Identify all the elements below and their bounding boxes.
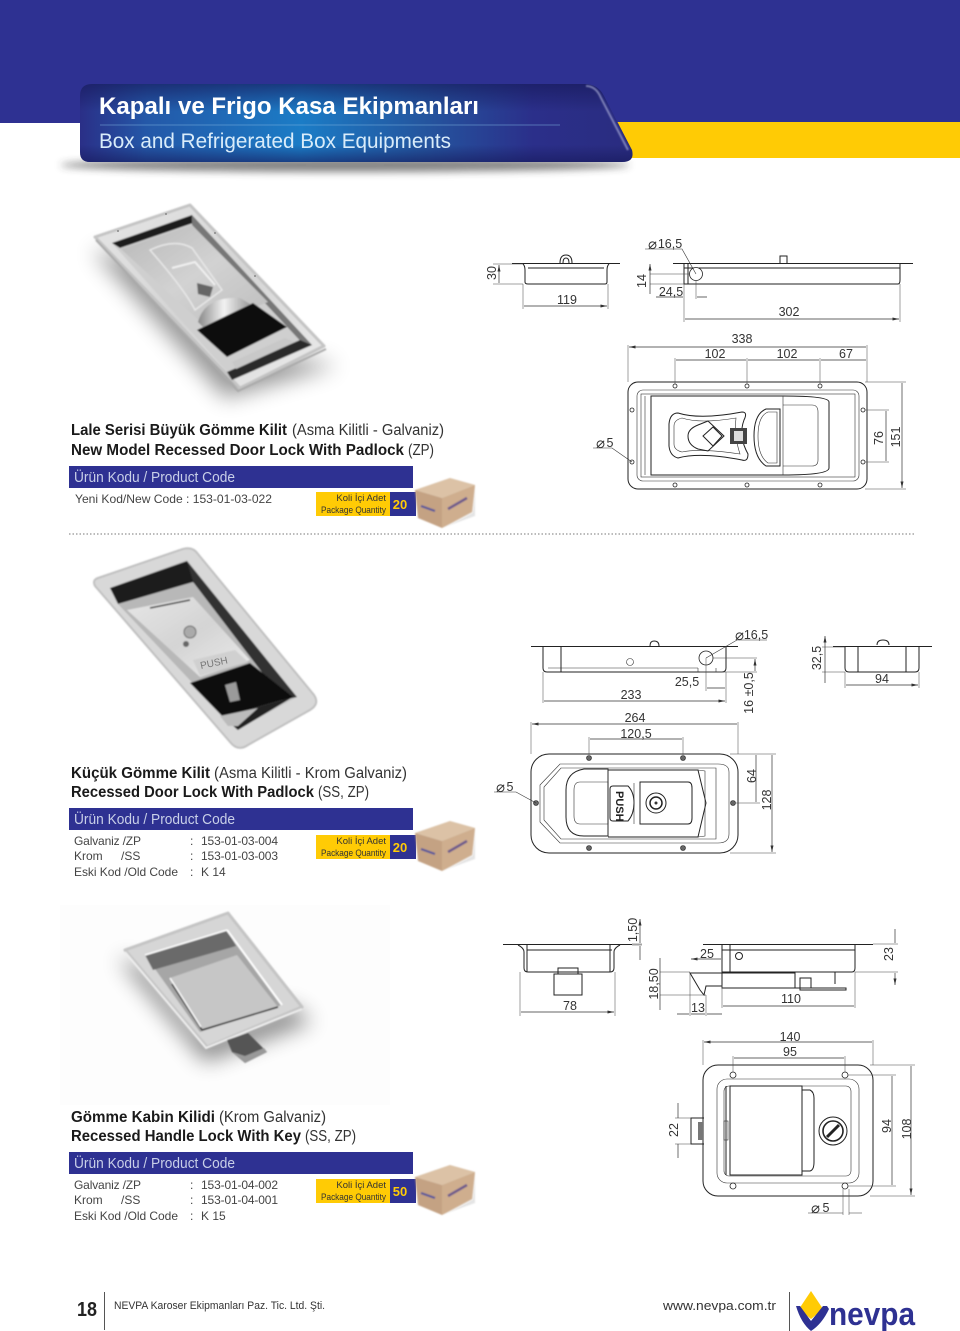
- side view: [531, 626, 768, 714]
- plan view: ⌀: [596, 434, 605, 452]
- heading: product 3 name: (Krom Galvaniz): [219, 1109, 326, 1126]
- side view: 23: [882, 947, 896, 961]
- product code bar 3: [69, 1152, 413, 1174]
- heading: product 2 name: (SS, ZP): [318, 784, 369, 801]
- product code table 3: :: [190, 1193, 193, 1207]
- end view: 32,5: [810, 646, 824, 670]
- product code table 3: Krom: [74, 1193, 103, 1207]
- plan view: 102: [777, 347, 797, 361]
- package quantity 3: 50: [393, 1184, 407, 1199]
- plan view: [667, 1030, 915, 1217]
- end view: [503, 918, 642, 1016]
- end view: 78: [563, 999, 577, 1013]
- heading: product 3 name: Gömme Kabin Kilidi: [71, 1109, 215, 1126]
- plan view: 120,5: [620, 727, 652, 741]
- header blue band: [0, 0, 960, 123]
- product code table 2: 153-01-03-003: [201, 849, 278, 863]
- plan view: 64: [745, 769, 759, 783]
- plan view: 128: [760, 790, 774, 810]
- product code table 2: :: [190, 849, 193, 863]
- plan view: 22: [667, 1123, 681, 1137]
- product code table 3: :: [190, 1209, 193, 1223]
- side view: [635, 235, 913, 322]
- product code table 2: Krom: [74, 849, 103, 863]
- end view: 30: [485, 266, 499, 280]
- technical drawing: small lock dimensions: [494, 626, 932, 853]
- plan view: 5: [607, 436, 614, 450]
- side view: 233: [621, 688, 641, 702]
- technical drawing: large lock dimensions: [485, 235, 913, 489]
- product code table 2: [74, 834, 278, 879]
- plan view: 76: [872, 431, 886, 445]
- product code bar 1: [69, 466, 413, 488]
- company name: NEVPA Karoser Ekipmanları Paz. Tic. Ltd. Şti.: [114, 1300, 325, 1312]
- product code bar 3: Ürün Kodu / Product Code: [74, 1154, 235, 1172]
- product code table 3: Eski Kod /Old Code: [74, 1209, 178, 1223]
- side view: 110: [781, 992, 801, 1006]
- photo: large recessed door lock: [92, 205, 338, 398]
- divider: [69, 533, 916, 535]
- product code table 3: [74, 1178, 278, 1223]
- product code table 2: 153-01-03-004: [201, 834, 278, 848]
- product code table 3: :: [190, 1178, 193, 1192]
- package quantity 2: Package Quantity: [321, 848, 386, 859]
- heading: product 1 name: (Asma Kilitli - Galvaniz): [292, 422, 444, 439]
- header yellow band: [600, 122, 960, 158]
- package quantity 3: [316, 1165, 475, 1215]
- plan view: 264: [625, 711, 645, 725]
- product code text 1: Yeni Kod/New Code : 153-01-03-022: [75, 492, 272, 506]
- side view: 18,50: [647, 968, 661, 1000]
- footer: [77, 1291, 915, 1331]
- label: PUSH on drawing: PUSH: [613, 791, 625, 822]
- side view: [647, 929, 898, 1016]
- product code table 2: /SS: [121, 849, 140, 863]
- heading: product 2 name: Recessed Door Lock With Padlock: [71, 784, 314, 801]
- product code bar 2: [69, 808, 413, 830]
- end view: 94: [875, 672, 889, 686]
- heading: product 1 name: Lale Serisi Büyük Gömme Kilit: [71, 422, 287, 439]
- heading: product 2 name: Küçük Gömme Kilit: [71, 765, 210, 782]
- side view: 13: [691, 1001, 705, 1015]
- heading: product 1 name: New Model Recessed Door Lock With Padlock: [71, 442, 404, 459]
- heading: English subtitle: Box and Refrigerated Box Equipments: [99, 130, 451, 153]
- side view: 16,5: [744, 628, 768, 642]
- end view: 119: [557, 293, 577, 307]
- product code table 3: /SS: [121, 1193, 140, 1207]
- side view: 302: [779, 305, 799, 319]
- side view: 16 ±0,5: [742, 672, 756, 714]
- plan view: [593, 332, 906, 489]
- end view: 1,50: [626, 918, 640, 942]
- photo: handle lock with key: [60, 905, 390, 1105]
- plan view: 5: [507, 780, 514, 794]
- technical drawing: handle lock dimensions: [503, 918, 915, 1217]
- title banner: [60, 84, 633, 172]
- end view: [485, 255, 620, 309]
- label: PUSH on photo: PUSH: [199, 655, 229, 672]
- logo: nevpa: [796, 1291, 915, 1331]
- package quantity 1: Koli İçi Adet: [336, 493, 386, 504]
- plan view: 95: [783, 1045, 797, 1059]
- website: www.nevpa.com.tr: [662, 1298, 777, 1313]
- heading: product 3 name: [71, 1109, 356, 1145]
- product code table 2: Galvaniz /ZP: [74, 834, 141, 848]
- product code bar 1: Ürün Kodu / Product Code: [74, 468, 235, 486]
- plan view: ⌀: [496, 778, 505, 796]
- product code table 3: 153-01-04-001: [201, 1193, 278, 1207]
- package quantity 2: [316, 821, 475, 871]
- heading: product 1 name: (ZP): [408, 442, 434, 459]
- logo: nevpa: nevpa: [829, 1296, 915, 1331]
- product code table 2: :: [190, 865, 193, 879]
- side view: 24,5: [659, 285, 683, 299]
- plan view: 102: [705, 347, 725, 361]
- heading: product 2 name: [71, 765, 407, 801]
- product code table 3: Galvaniz /ZP: [74, 1178, 141, 1192]
- end view: [810, 636, 932, 688]
- product code table 2: Eski Kod /Old Code: [74, 865, 178, 879]
- plan view: [494, 711, 776, 853]
- plan view: 5: [823, 1201, 830, 1215]
- side view: 16,5: [658, 237, 682, 251]
- package quantity 2: Koli İçi Adet: [336, 836, 386, 847]
- package quantity 1: 20: [393, 497, 407, 512]
- icon: cardboard box: [415, 821, 475, 871]
- icon: cardboard box: [415, 1165, 475, 1215]
- package quantity 1: [316, 478, 475, 528]
- package quantity 1: Package Quantity: [321, 505, 386, 516]
- heading: product 3 name: (SS, ZP): [305, 1128, 356, 1145]
- plan view: 67: [839, 347, 853, 361]
- plan view: 140: [780, 1030, 800, 1044]
- heading: Turkish title: Kapalı ve Frigo Kasa Ekipmanları: [99, 93, 479, 120]
- side view: ⌀: [735, 626, 744, 644]
- package quantity 2: 20: [393, 840, 407, 855]
- heading: product 2 name: (Asma Kilitli - Krom Galvaniz): [214, 765, 407, 782]
- side view: 14: [635, 274, 649, 288]
- heading: product 3 name: Recessed Handle Lock With Key: [71, 1128, 301, 1145]
- product code table 3: K 15: [201, 1209, 226, 1223]
- side view: 25,5: [675, 675, 699, 689]
- product code table 2: :: [190, 834, 193, 848]
- plan view: 108: [900, 1119, 914, 1139]
- plan view: ⌀: [811, 1199, 820, 1217]
- product code bar 2: Ürün Kodu / Product Code: [74, 810, 235, 828]
- plan view: 94: [880, 1119, 894, 1133]
- page number: 18: [77, 1299, 97, 1321]
- product code table 3: 153-01-04-002: [201, 1178, 278, 1192]
- product code table 2: K 14: [201, 865, 226, 879]
- side view: 25: [700, 947, 714, 961]
- plan view: 151: [889, 427, 903, 447]
- photo: recessed door lock with PUSH: [94, 548, 316, 748]
- heading: product 1 name: [71, 422, 444, 459]
- icon: cardboard box: [415, 478, 475, 528]
- package quantity 3: Package Quantity: [321, 1192, 386, 1203]
- package quantity 3: Koli İçi Adet: [336, 1180, 386, 1191]
- side view: ⌀: [648, 235, 657, 253]
- plan view: 338: [732, 332, 752, 346]
